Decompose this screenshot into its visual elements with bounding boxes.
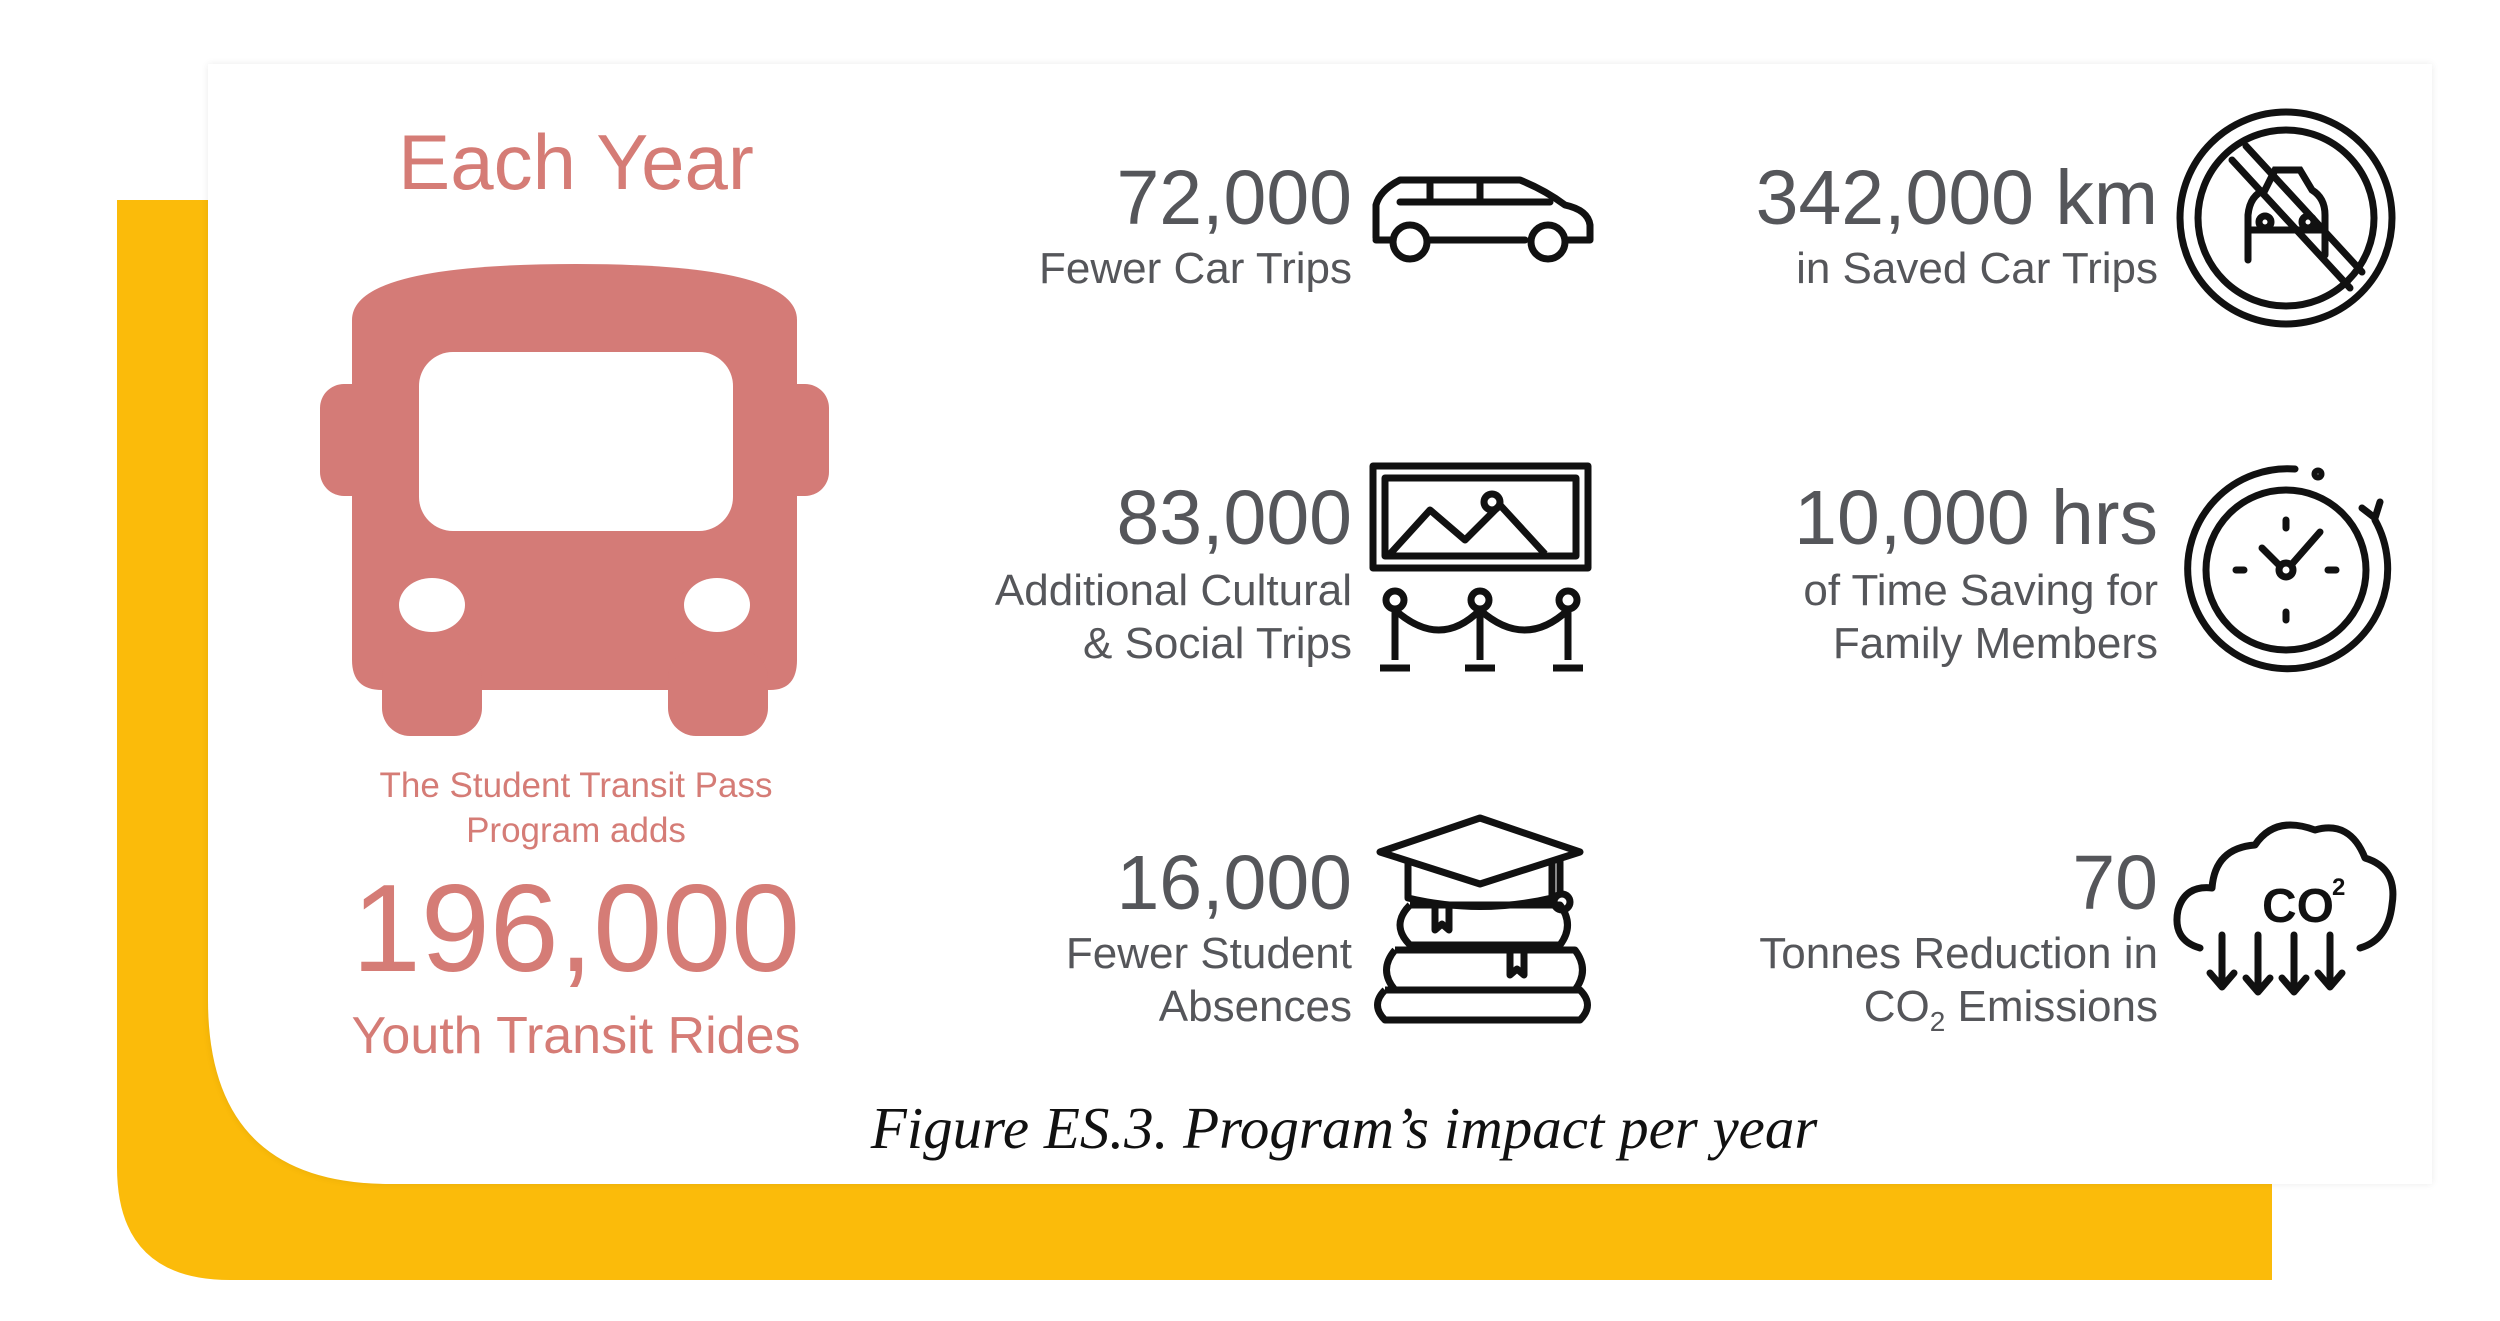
icon: bus	[320, 264, 829, 736]
stat: 196,000 youth transit rides	[351, 860, 801, 1065]
stat: time saving	[1794, 475, 2158, 668]
stat: cultural trips: & Social Trips	[1083, 619, 1352, 668]
stat: CO2 reduction	[1759, 840, 2158, 1037]
text: program adds: The Student Transit Pass	[380, 766, 772, 805]
text: program adds: Program adds	[466, 811, 686, 850]
stat: 196,000 youth transit rides: Youth Transit Rides	[351, 1007, 801, 1065]
icon: clock	[2188, 469, 2388, 669]
stat: time saving: 10,000 hrs	[1794, 475, 2158, 561]
stat: CO2 reduction: CO	[1864, 982, 1930, 1031]
stat: CO2 reduction: 70	[2072, 840, 2158, 926]
icon: CO2 cloud: 2	[2332, 874, 2345, 901]
stat: time saving: Family Members	[1833, 619, 2158, 668]
icon: car	[1376, 180, 1590, 259]
stat: 196,000 youth transit rides: 196,000	[352, 860, 800, 998]
text: program adds	[380, 766, 772, 850]
icon: books and cap	[1378, 818, 1588, 1020]
stat: fewer car trips: 72,000	[1116, 155, 1352, 241]
stat: cultural trips: Additional Cultural	[995, 566, 1352, 615]
icon: no car	[2180, 112, 2392, 324]
stat: cultural trips	[995, 475, 1352, 668]
stat: saved car km: 342,000 km	[1756, 155, 2158, 241]
stat: student absences: Absences	[1159, 982, 1352, 1031]
icon: CO2 cloud	[2177, 825, 2393, 992]
stat: student absences: Fewer Student	[1066, 929, 1352, 978]
yellow backing frame	[117, 200, 2272, 1280]
stat: student absences	[1066, 840, 1352, 1031]
stat: fewer car trips: Fewer Car Trips	[1039, 244, 1352, 293]
heading: Each Year: Each Year	[398, 118, 754, 206]
stat: CO2 reduction: Emissions	[1945, 982, 2158, 1031]
stat: fewer car trips	[1039, 155, 1352, 293]
icon: CO2 cloud: CO	[2262, 880, 2334, 933]
stat: student absences: 16,000	[1116, 840, 1352, 926]
stat: saved car km	[1756, 155, 2158, 293]
white panel	[208, 64, 2432, 1184]
stat: CO2 reduction: Tonnes Reduction in	[1759, 929, 2158, 978]
stat: saved car km: in Saved Car Trips	[1796, 244, 2158, 293]
stat: cultural trips: 83,000	[1116, 475, 1352, 561]
icon: gallery	[1373, 466, 1588, 668]
caption: Figure ES.3. Program’s impact per year	[870, 1095, 1818, 1161]
stat: CO2 reduction: 2	[1930, 1006, 1945, 1037]
stat: time saving: of Time Saving for	[1803, 566, 2158, 615]
